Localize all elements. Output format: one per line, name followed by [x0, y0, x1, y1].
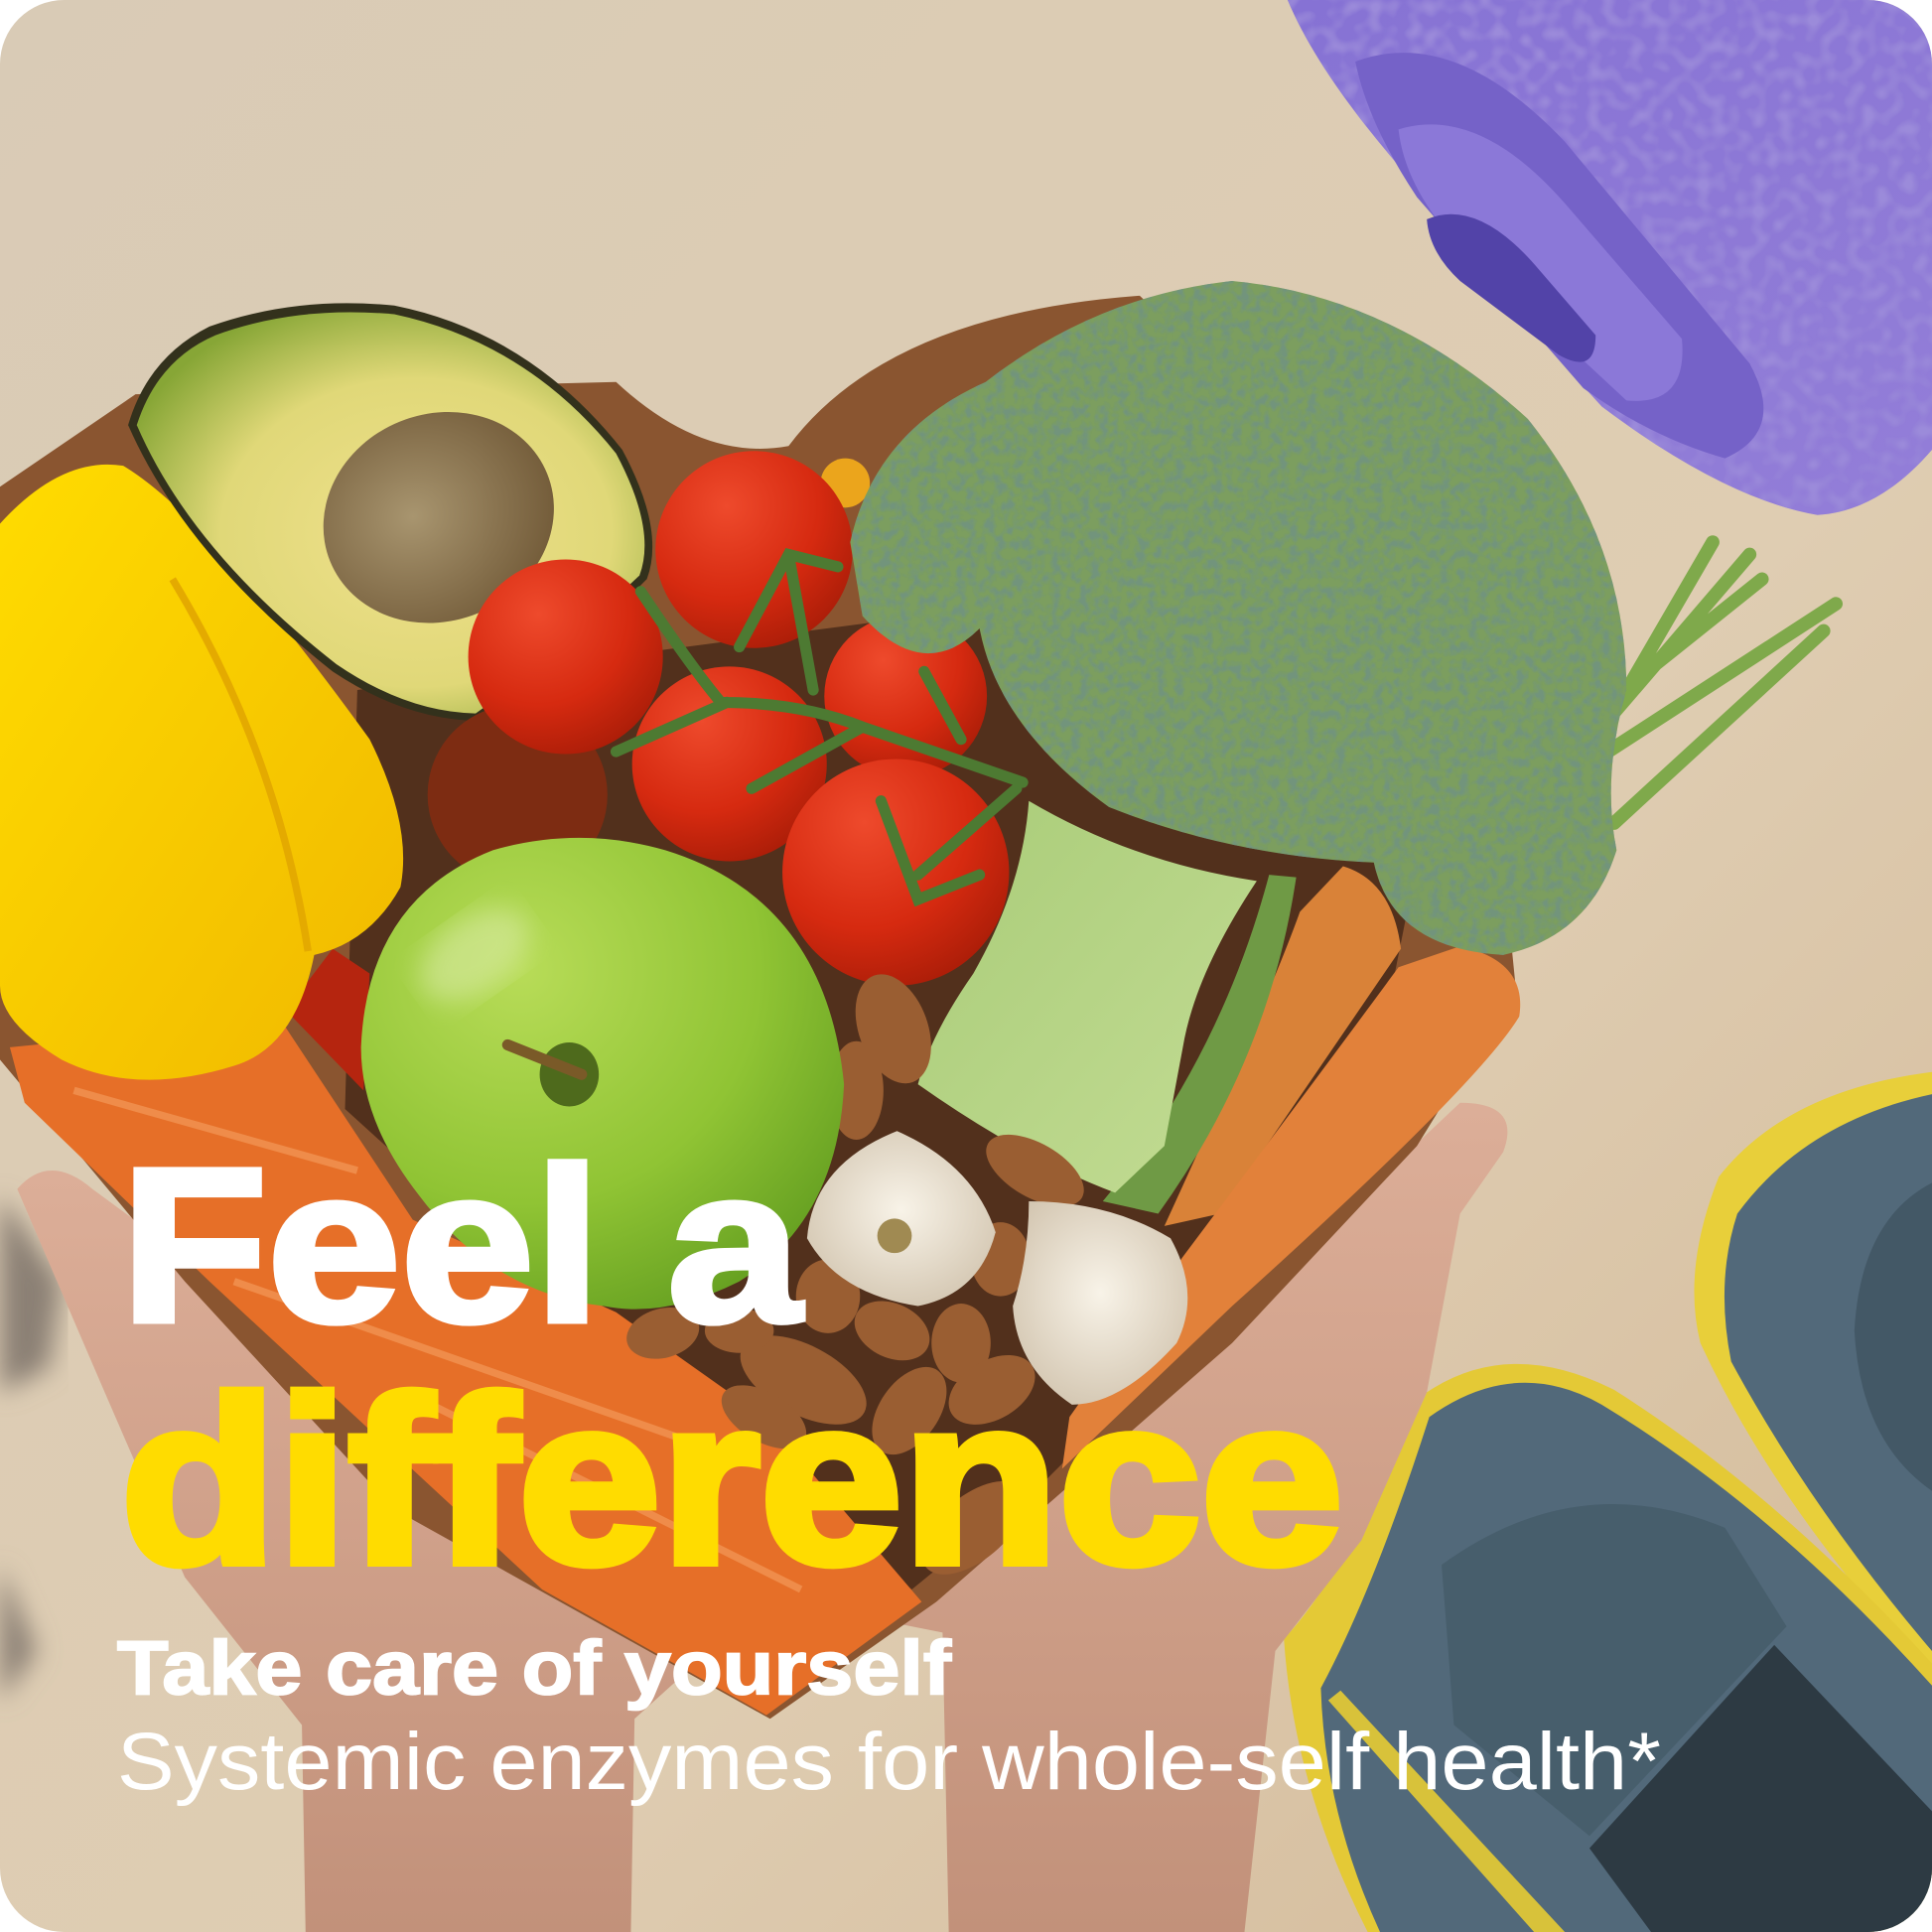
avocado pit — [324, 412, 554, 623]
title line 1: Feel a — [121, 1122, 803, 1367]
carrots — [1062, 866, 1520, 1468]
spring onion greens — [1601, 542, 1836, 823]
tagline: Systemic enzymes for whole-self health* — [117, 1717, 1661, 1807]
halved avocado — [128, 303, 652, 721]
left hand — [18, 1171, 675, 1932]
heart-shaped wooden bowl — [0, 296, 1516, 1719]
mat centre hole — [1427, 214, 1595, 362]
blurred dumbbell at left edge — [0, 1195, 62, 1701]
title line 2: difference — [121, 1349, 1343, 1613]
title — [127, 1159, 1339, 1569]
green bean — [1103, 875, 1297, 1213]
back sneaker — [1694, 1072, 1932, 1676]
subheading: Take care of yourself — [117, 1625, 952, 1711]
salmon fillet — [10, 1021, 921, 1716]
dark tomato — [427, 711, 608, 866]
front sneaker — [1284, 1364, 1932, 1932]
red pepper slice — [286, 949, 369, 1090]
yellow bell pepper — [0, 465, 403, 1080]
broccoli crown — [850, 281, 1626, 955]
right hand — [903, 1102, 1507, 1932]
green apple — [361, 838, 844, 1310]
garlic bulbs — [807, 1131, 1187, 1405]
dark bowl interior — [345, 592, 1417, 1589]
almonds — [621, 964, 1095, 1592]
broccoli stalk — [918, 801, 1257, 1192]
rolled purple yoga mat — [1288, 0, 1932, 515]
tomatoes on the vine — [469, 451, 1023, 986]
